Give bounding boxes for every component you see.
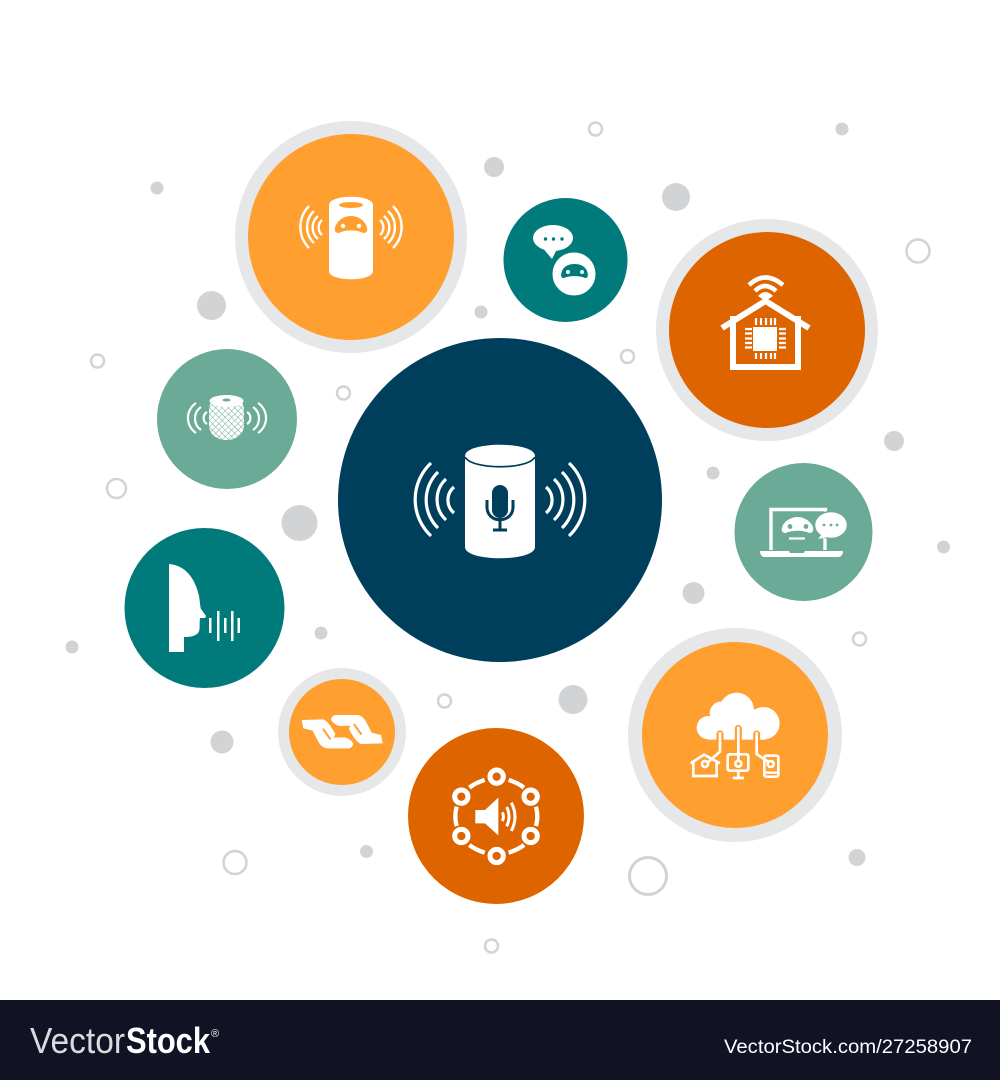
bubble: mesh smart speaker [157,349,297,489]
footer band [0,1000,1000,1080]
bubble: central voice assistant [338,338,662,662]
bubble: smart home chip [656,219,878,441]
bubble: chatbot conversation [504,198,628,322]
icon: house with chip and wifi [722,278,809,367]
footer logo: ® [211,1028,219,1040]
bubble: smart speaker with robot face [235,121,467,353]
bubble: cloud connected devices [628,628,842,842]
decorative scattered dots [66,122,950,952]
icon: laptop with robot and speech bubble [760,510,848,557]
footer logo: Vector [30,1020,125,1061]
icon: speech bubble and robot [533,225,596,296]
right hand [331,715,383,744]
bubble: caring hands [278,668,406,796]
footer logo: Stock [126,1020,211,1061]
left hand [302,719,353,748]
icon: mesh speaker [188,395,266,440]
footer image id: VectorStock.com/27258907 [724,1037,972,1058]
icon: cloud with home, monitor and phone [691,693,780,778]
icon: head with sound wave [169,564,240,652]
bubble: networked audio [408,728,584,904]
icon: robot speaker [300,197,402,279]
footer logo [30,1020,219,1061]
icon: two hands [302,715,383,748]
icon: voice speaker with microphone [415,445,585,558]
bubble: laptop chatbot [734,463,872,601]
icon: speaker in node ring [455,770,537,863]
bubble: speaking profile [124,528,284,688]
